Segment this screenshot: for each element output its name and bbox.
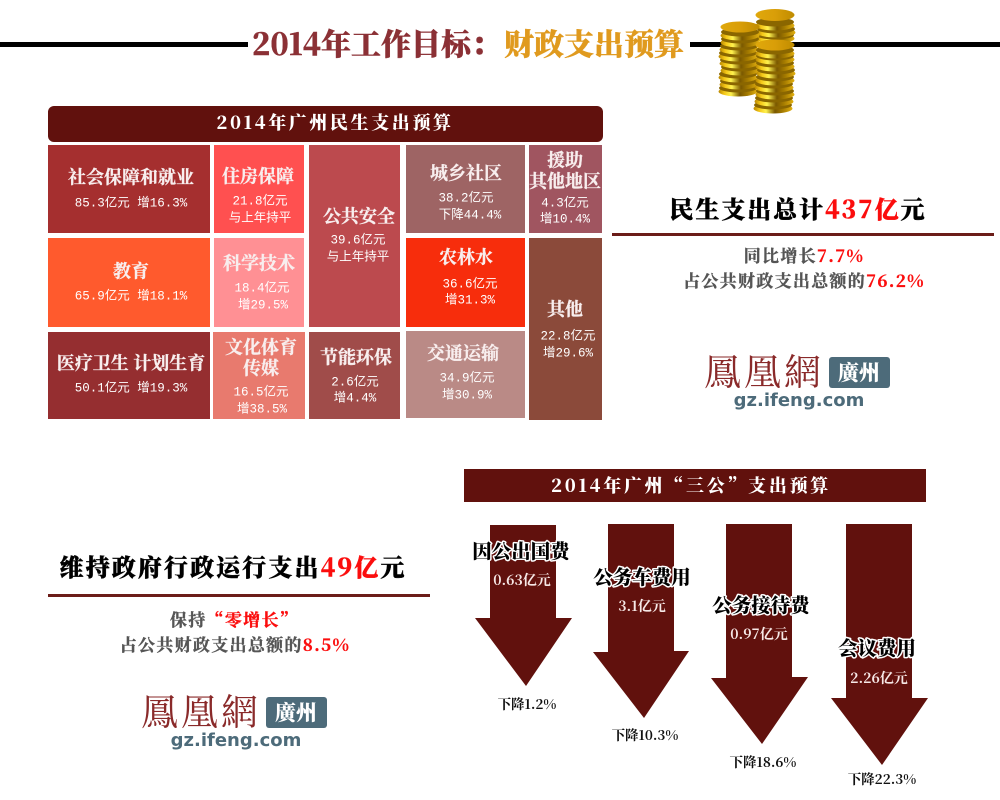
arrow: official vehicles xyxy=(593,524,691,744)
arrow: official vehicles: 下降10.3% xyxy=(612,724,678,744)
icon: gold coin stacks xyxy=(718,9,796,114)
cell: culture: 文化体育 xyxy=(225,338,297,358)
cell: other: 22.8亿元 xyxy=(540,328,596,344)
callout: livelihood total: 同比增长7.7% xyxy=(744,242,864,267)
cell: education: 教育 xyxy=(113,262,149,282)
arrow: overseas trips: 因公出国费 xyxy=(472,536,571,564)
cell: science: 增29.5% xyxy=(238,296,288,312)
cell: science: 18.4亿元 xyxy=(234,280,290,296)
cell: other: 增29.6% xyxy=(543,344,593,360)
cell: housing: 与上年持平 xyxy=(229,210,291,226)
logo: ifeng Guangzhou top: gz.ifeng.com xyxy=(734,390,864,411)
cell: aid: 其他地区 xyxy=(529,172,601,192)
logo: ifeng Guangzhou bottom xyxy=(141,682,327,751)
cell: public safety: 与上年持平 xyxy=(327,248,389,264)
panel: three public expenses header: 2014年广州“三公”支出预算 xyxy=(551,472,831,498)
cell: housing: 住房保障 xyxy=(222,166,294,186)
logo: ifeng Guangzhou top: 廣州 xyxy=(838,357,880,387)
arrow: official vehicles: 公务车费用 xyxy=(593,562,691,590)
cell: community: 城乡社区 xyxy=(430,162,502,184)
cell: housing: 21.8亿元 xyxy=(232,192,288,208)
arrow: official hospitality xyxy=(711,524,811,771)
cell: education: 65.9亿元 增18.1% xyxy=(75,288,188,304)
title rule right xyxy=(690,42,1000,47)
arrow: official vehicles: 3.1亿元 xyxy=(618,596,666,616)
cell: transport: 增30.9% xyxy=(442,386,492,402)
cell: other: 其他 xyxy=(547,300,583,320)
logo: ifeng Guangzhou top xyxy=(704,342,890,411)
cell: public safety: 公共安全 xyxy=(323,206,395,226)
title rule left xyxy=(0,42,248,47)
cell: aid: 增10.4% xyxy=(540,210,590,226)
cell: other xyxy=(529,238,602,420)
cell: health xyxy=(48,332,210,419)
cell: social security xyxy=(48,145,210,233)
logo: ifeng Guangzhou top: 鳳凰網 xyxy=(704,342,824,396)
cell: agriculture: 农林水 xyxy=(438,248,493,268)
cell: transport: 34.9亿元 xyxy=(439,370,495,386)
cell: aid: 援助 xyxy=(547,150,583,170)
cell: community xyxy=(406,145,525,233)
cell: health: 50.1亿元 增19.3% xyxy=(75,380,188,396)
cell: education xyxy=(48,238,210,327)
cell: community: 38.2亿元 xyxy=(438,190,494,206)
cell: housing xyxy=(214,145,304,233)
arrow: overseas trips xyxy=(472,525,572,713)
arrow: official hospitality: 公务接待费 xyxy=(712,590,811,618)
callout: government operations: 保持“零增长” xyxy=(170,606,298,631)
arrow: official hospitality: 下降18.6% xyxy=(730,751,796,771)
panel: livelihood budget header xyxy=(48,106,603,142)
callout: government operations: 占公共财政支出总额的8.5% xyxy=(120,631,350,656)
callout: government operations: 维持政府行政运行支出49亿元 xyxy=(60,548,406,583)
cell: transport xyxy=(406,331,525,418)
cell: social security: 社会保障和就业 xyxy=(68,166,194,188)
logo: ifeng Guangzhou bottom: 廣州 xyxy=(275,697,317,727)
cell: agriculture: 36.6亿元 xyxy=(442,276,498,292)
cell: energy: 增4.4% xyxy=(334,390,377,406)
cell: science: 科学技术 xyxy=(223,254,295,274)
cell: public safety xyxy=(309,145,400,327)
arrow: overseas trips: 下降1.2% xyxy=(498,693,556,713)
panel: three public expenses header xyxy=(464,469,926,502)
cell: aid xyxy=(529,145,602,233)
panel: livelihood budget header: 2014年广州民生支出预算 xyxy=(216,109,454,135)
cell: social security: 85.3亿元 增16.3% xyxy=(75,194,188,210)
arrow: overseas trips: 0.63亿元 xyxy=(493,570,551,590)
arrow: meetings xyxy=(831,524,928,788)
cell: health: 医疗卫生 计划生育 xyxy=(57,354,205,374)
arrow: meetings: 2.26亿元 xyxy=(850,668,908,688)
cell: science xyxy=(214,238,304,327)
cell: energy xyxy=(309,332,400,419)
callout: government operations xyxy=(48,548,430,656)
logo: ifeng Guangzhou bottom: gz.ifeng.com xyxy=(171,730,301,751)
arrow: official hospitality: 0.97亿元 xyxy=(730,624,788,644)
cell: agriculture xyxy=(406,238,525,327)
cell: community: 下降44.4% xyxy=(439,208,502,222)
callout: livelihood total: 民生支出总计437亿元 xyxy=(670,190,926,225)
cell: culture: 增38.5% xyxy=(237,400,287,416)
arrow: meetings: 下降22.3% xyxy=(848,768,916,788)
title: 2014年工作目标：财政支出预算 xyxy=(252,20,684,64)
cell: aid: 4.3亿元 xyxy=(541,194,589,210)
cell: culture xyxy=(213,332,305,419)
cell: public safety: 39.6亿元 xyxy=(330,232,386,248)
arrow: meetings: 会议费用 xyxy=(838,633,916,661)
logo: ifeng Guangzhou bottom: 鳳凰網 xyxy=(141,682,261,736)
cell: agriculture: 增31.3% xyxy=(445,292,495,308)
callout: livelihood total: 占公共财政支出总额的76.2% xyxy=(683,267,925,292)
panel: treemap xyxy=(48,145,602,420)
callout: livelihood total xyxy=(612,190,994,292)
cell: energy: 2.6亿元 xyxy=(331,374,379,390)
cell: energy: 节能环保 xyxy=(320,346,392,368)
cell: culture: 16.5亿元 xyxy=(233,384,289,400)
cell: culture: 传媒 xyxy=(243,358,279,378)
cell: transport: 交通运输 xyxy=(427,342,499,364)
